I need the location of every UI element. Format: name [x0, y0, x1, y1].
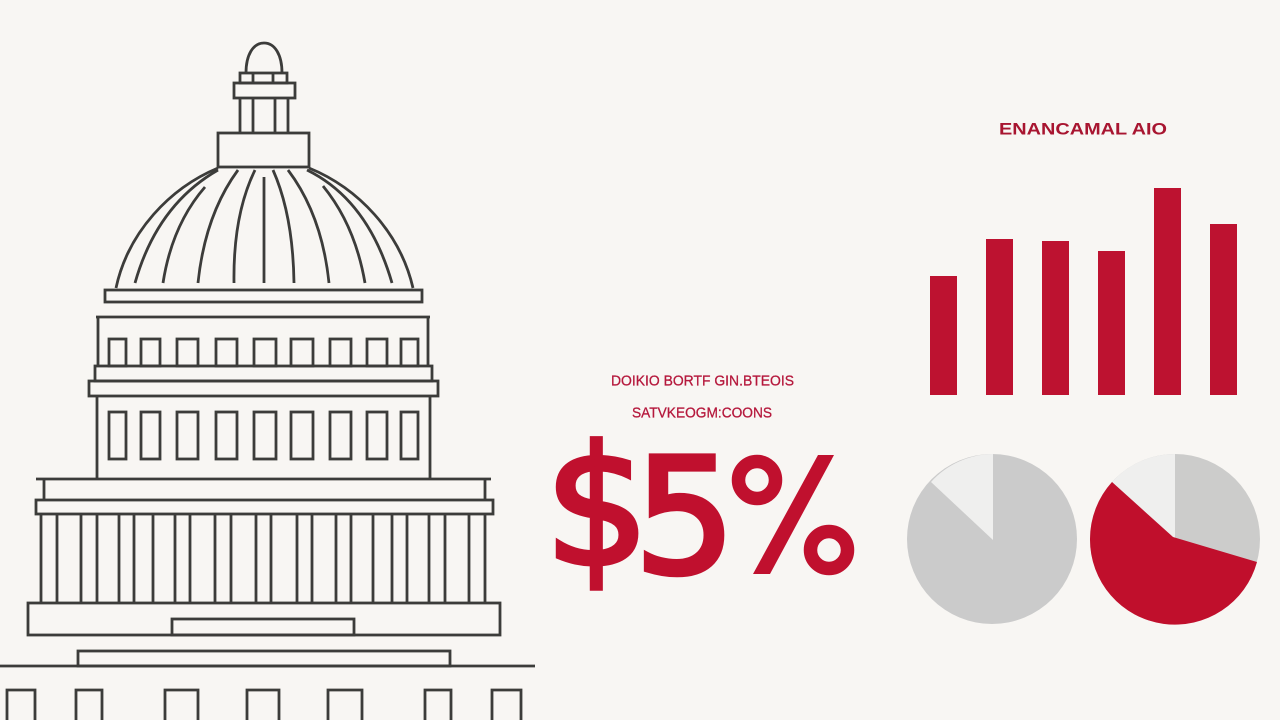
dome with ribs: [116, 168, 413, 288]
caption line one: DOIKIO BORTF GIN.BTEOIS: [611, 372, 794, 390]
icon: capitol building line drawing: [0, 43, 535, 720]
big statistic: 5: [634, 424, 736, 610]
entablature: [36, 479, 493, 514]
colonnade: [41, 514, 485, 603]
upper drum with windows: [96, 317, 430, 366]
big statistic: %: [726, 431, 861, 611]
big statistic: $: [545, 411, 650, 603]
bar chart: [930, 188, 1237, 395]
cupola base block: [218, 133, 309, 167]
caption line two: SATVKEOGM:COONS: [632, 404, 772, 422]
plinth: [28, 603, 500, 635]
dome base band: [105, 290, 422, 302]
big statistic: [556, 436, 854, 591]
lower drum with windows: [97, 396, 430, 478]
drum cornice bands: [89, 366, 438, 396]
cupola lantern: [234, 43, 295, 133]
pie chart: grey: [907, 454, 1077, 624]
lower row of piers: [7, 690, 521, 720]
chart title: ENANCAMAL AIO: [999, 120, 1167, 138]
pie chart: red: [1090, 454, 1260, 625]
front step and ground line: [0, 651, 535, 666]
